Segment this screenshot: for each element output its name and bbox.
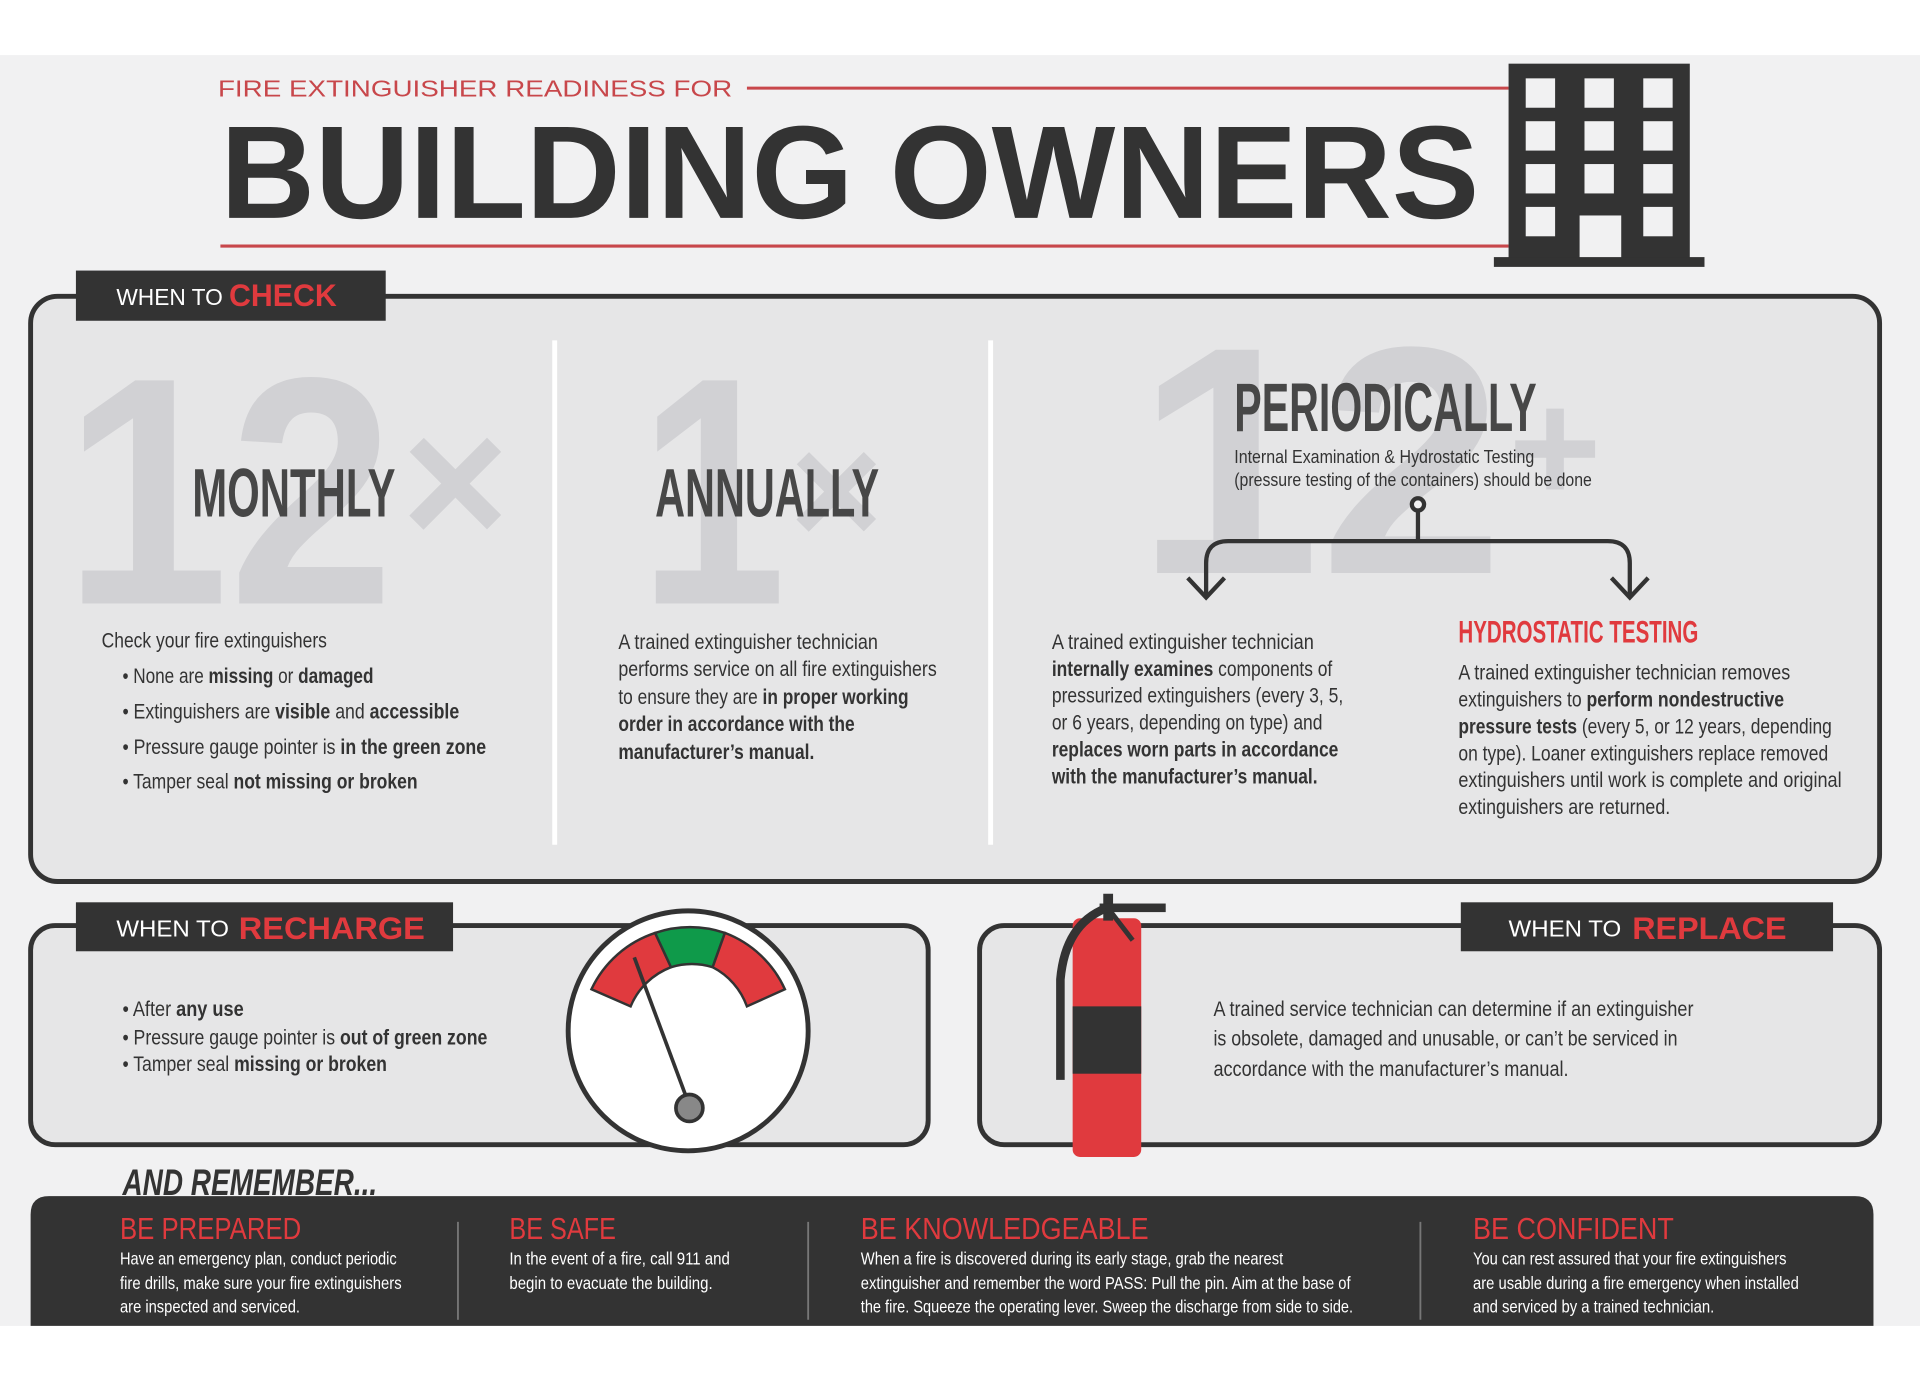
header subtitle: FIRE EXTINGUISHER READINESS FOR bbox=[218, 76, 732, 102]
text: internal examination: internally examines components of bbox=[1052, 658, 1332, 681]
text: internal examination: with the manufacturer’s manual. bbox=[1051, 766, 1318, 789]
tip: be confident: BE CONFIDENT bbox=[1473, 1212, 1674, 1246]
text: internal examination: pressurized extinguishers (every 3, 5, bbox=[1052, 685, 1343, 708]
text: annually: performs service on all fire extinguishers bbox=[618, 658, 937, 681]
recharge bullets: • After any use bbox=[122, 998, 244, 1021]
recharge bullets: • Pressure gauge pointer is out of green zone bbox=[122, 1026, 487, 1049]
big number background: 1 bbox=[639, 310, 786, 673]
text: monthly bbox=[102, 630, 486, 793]
text: monthly: • Pressure gauge pointer is in the green zone bbox=[122, 736, 486, 759]
connector arrows bbox=[1188, 498, 1648, 597]
tip: be safe bbox=[509, 1212, 730, 1293]
big number background bbox=[64, 279, 1602, 673]
icon: pressure gauge bbox=[568, 911, 808, 1151]
tip: be knowledgeable: When a fire is discovered during its early stage, grab the nearest bbox=[861, 1249, 1283, 1269]
big number background: × bbox=[790, 401, 883, 579]
periodic subtext: Internal Examination & Hydrostatic Testing bbox=[1234, 446, 1534, 467]
tab: recharge: WHEN TO bbox=[116, 916, 229, 942]
tip: be confident bbox=[1473, 1212, 1799, 1316]
text: annually: to ensure they are in proper working bbox=[618, 686, 909, 709]
replace text: is obsolete, damaged and unusable, or can’t be serviced in bbox=[1213, 1028, 1678, 1051]
tab: replace: WHEN TO bbox=[1509, 916, 1621, 942]
big number background: 12 bbox=[1136, 279, 1504, 642]
tip: be prepared bbox=[120, 1212, 402, 1316]
heading: and remember: AND REMEMBER... bbox=[122, 1162, 377, 1203]
text: internal examination: A trained extinguisher technician bbox=[1052, 631, 1314, 654]
panel: when to recharge bbox=[31, 902, 928, 1145]
text: monthly: Check your fire extinguishers bbox=[102, 630, 327, 653]
big number background: × bbox=[402, 379, 509, 584]
heading: monthly: MONTHLY bbox=[192, 455, 396, 532]
tab: recharge: RECHARGE bbox=[239, 910, 425, 946]
tip: be confident: are usable during a fire emergency when installed bbox=[1473, 1273, 1799, 1293]
tip: be confident: and serviced by a trained technician. bbox=[1473, 1296, 1714, 1316]
text: hydrostatic testing: A trained extinguisher technician removes bbox=[1458, 661, 1790, 684]
tab: recharge bbox=[76, 902, 453, 951]
periodic subtext bbox=[1234, 446, 1592, 490]
text: hydrostatic testing: extinguishers are returned. bbox=[1458, 796, 1670, 819]
recharge bullets: • Tamper seal missing or broken bbox=[122, 1053, 387, 1076]
tab: check: WHEN TO bbox=[116, 284, 223, 310]
tip: be knowledgeable: the fire. Squeeze the operating lever. Sweep the discharge from side to side. bbox=[861, 1296, 1353, 1316]
icon: fire extinguisher bbox=[1060, 894, 1166, 1157]
title: BUILDING OWNERS bbox=[220, 99, 1479, 247]
text: monthly: • Extinguishers are visible and accessible bbox=[122, 701, 459, 724]
text: hydrostatic testing: HYDROSTATIC TESTING bbox=[1458, 614, 1698, 650]
text: hydrostatic testing: pressure tests (every 5, or 12 years, depending bbox=[1458, 715, 1832, 738]
tip: be safe: begin to evacuate the building. bbox=[509, 1273, 713, 1293]
text: hydrostatic testing: extinguishers until work is complete and original bbox=[1458, 769, 1842, 792]
tip: be knowledgeable bbox=[861, 1212, 1353, 1316]
text: annually: manufacturer’s manual. bbox=[618, 741, 814, 764]
periodic subtext: (pressure testing of the containers) should be done bbox=[1234, 469, 1592, 490]
text: annually: order in accordance with the bbox=[618, 713, 855, 736]
panel: remember tips bbox=[31, 1196, 1873, 1326]
text: monthly: • Tamper seal not missing or broken bbox=[122, 770, 418, 793]
text: annually: A trained extinguisher technician bbox=[618, 631, 878, 654]
tip: be safe: BE SAFE bbox=[509, 1212, 616, 1246]
heading: annually: ANNUALLY bbox=[655, 455, 879, 532]
replace text: accordance with the manufacturer’s manual. bbox=[1213, 1058, 1569, 1081]
tip: be safe: In the event of a fire, call 911 and bbox=[509, 1249, 730, 1269]
tip: be knowledgeable: BE KNOWLEDGEABLE bbox=[861, 1212, 1149, 1246]
tip: be prepared: BE PREPARED bbox=[120, 1212, 301, 1246]
recharge bullets bbox=[122, 998, 487, 1076]
text: annually bbox=[618, 631, 937, 764]
text: internal examination bbox=[1051, 631, 1343, 789]
text: hydrostatic testing: on type). Loaner extinguishers replace removed bbox=[1458, 742, 1828, 765]
tip: be prepared: Have an emergency plan, conduct periodic bbox=[120, 1249, 397, 1269]
panel: when to check bbox=[31, 271, 1880, 881]
icon: building bbox=[1494, 64, 1704, 267]
big number background: 12 bbox=[64, 310, 394, 673]
replace text bbox=[1213, 998, 1694, 1081]
text: hydrostatic testing bbox=[1458, 614, 1842, 819]
panel: when to replace bbox=[980, 902, 1880, 1145]
text: internal examination: or 6 years, depending on type) and bbox=[1052, 712, 1322, 735]
tip: be knowledgeable: extinguisher and remember the word PASS: Pull the pin. Aim at the base of bbox=[861, 1273, 1351, 1293]
replace text: A trained service technician can determine if an extinguisher bbox=[1213, 998, 1694, 1021]
tab: check bbox=[76, 271, 386, 321]
heading: periodically: PERIODICALLY bbox=[1234, 369, 1537, 446]
text: hydrostatic testing: extinguishers to perform nondestructive bbox=[1458, 688, 1784, 711]
tip: be confident: You can rest assured that your fire extinguishers bbox=[1473, 1249, 1787, 1269]
tip: be prepared: fire drills, make sure your fire extinguishers bbox=[120, 1273, 402, 1293]
big number background: + bbox=[1509, 358, 1602, 536]
text: monthly: • None are missing or damaged bbox=[122, 665, 373, 688]
tab: replace: REPLACE bbox=[1632, 910, 1787, 946]
tab: check: CHECK bbox=[229, 277, 337, 313]
text: internal examination: replaces worn parts in accordance bbox=[1052, 739, 1338, 762]
tip: be prepared: are inspected and serviced. bbox=[120, 1296, 300, 1316]
tab: replace bbox=[1461, 902, 1833, 951]
